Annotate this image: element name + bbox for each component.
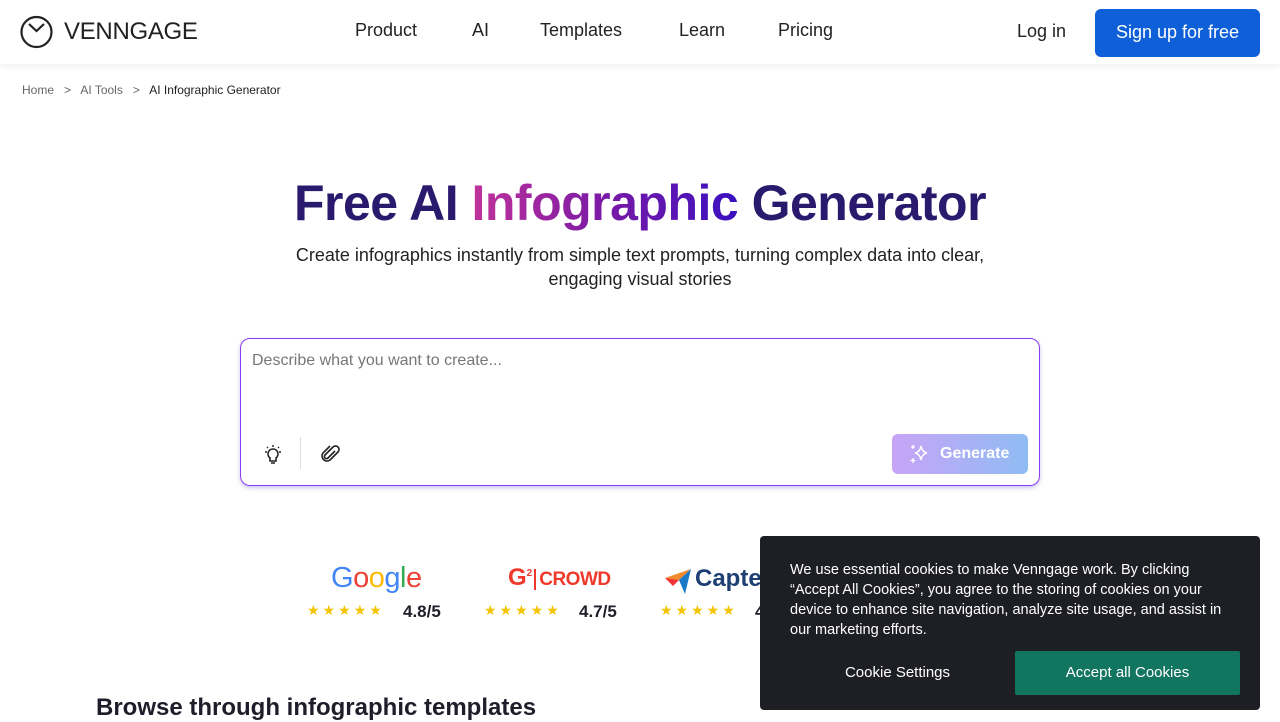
header nav bar: Pricing bbox=[778, 20, 833, 40]
section heading: Browse through infographic templates bbox=[96, 694, 536, 721]
rating: google: 4.8/5 bbox=[403, 602, 441, 621]
subtitle: Create infographics instantly from simple text prompts, turning complex data into clear, engaging visual stories bbox=[296, 245, 984, 289]
placeholder: Describe what you want to create... bbox=[252, 352, 502, 369]
accept button: Accept all Cookies bbox=[1066, 664, 1189, 681]
signup button bbox=[1095, 9, 1260, 57]
signup button: Sign up for free bbox=[1116, 22, 1239, 42]
title: Free AI Infographic Generator bbox=[294, 175, 986, 231]
cookie settings button: Cookie Settings bbox=[845, 664, 950, 681]
accept button bbox=[1015, 651, 1240, 695]
rating: g2 crowd bbox=[484, 564, 617, 621]
breadcrumb: Home > AI Tools > AI Infographic Generator bbox=[22, 83, 281, 97]
rating: capterra bbox=[660, 565, 760, 621]
header nav bar: AI bbox=[472, 20, 489, 40]
rating: g2 crowd: G2 CROWD bbox=[508, 564, 611, 591]
generate button bbox=[892, 434, 1028, 474]
rating: google: ★★★★★ bbox=[307, 602, 385, 618]
icon: bulb bbox=[265, 445, 281, 464]
header nav bar: Templates bbox=[540, 20, 622, 40]
rating: google: Google bbox=[331, 562, 422, 594]
logo: VENNGAGE bbox=[64, 18, 198, 45]
cookie banner bbox=[760, 536, 1260, 710]
rating: g2 crowd: ★★★★★ bbox=[484, 602, 562, 618]
rating: google bbox=[307, 562, 441, 621]
rating: g2 crowd: 4.7/5 bbox=[579, 602, 617, 621]
cookie text: We use essential cookies to make Venngage work. By clicking “Accept All Cookies”, you agree to the storing of cookies on your device to enhance site navigation, analyze site usage, and assist in our marketing efforts. bbox=[790, 562, 1221, 638]
generate button: Generate bbox=[940, 445, 1009, 462]
prompt box bbox=[240, 338, 1040, 486]
icon: paperclip bbox=[321, 445, 340, 462]
nav links: Product bbox=[355, 20, 417, 40]
rating: capterra: ★★★★★ bbox=[660, 602, 738, 618]
header nav bar: Learn bbox=[679, 20, 725, 40]
login: Log in bbox=[1017, 21, 1066, 41]
logo bbox=[20, 16, 198, 48]
header nav bar bbox=[0, 0, 1280, 64]
